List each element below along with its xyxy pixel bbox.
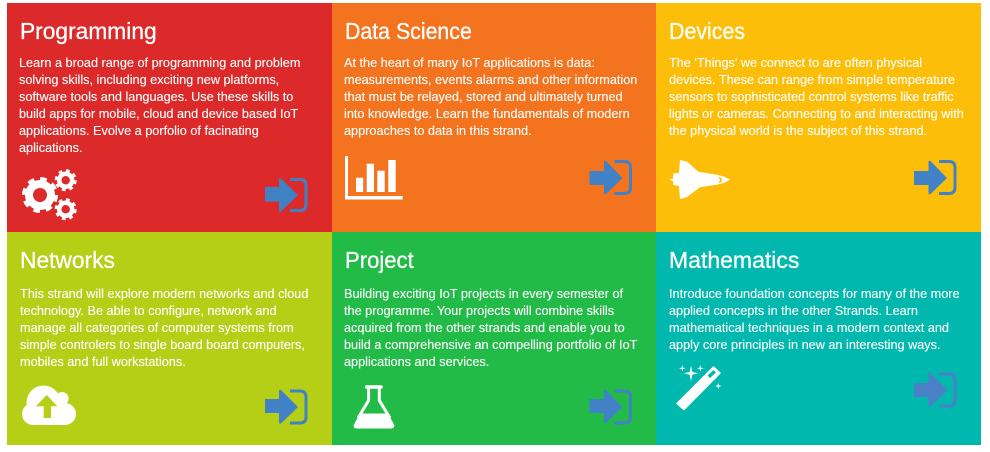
text: data science: At the heart of many IoT applications is data: bbox=[344, 56, 595, 70]
text: devices: devices. These can range from simple temperature bbox=[669, 73, 955, 87]
arrow: programming bbox=[265, 178, 306, 212]
text: programming: software tools and languages. Use these skills to bbox=[19, 90, 293, 104]
text: devices bbox=[669, 56, 964, 138]
text: networks: This strand will explore modern networks and cloud bbox=[20, 287, 308, 301]
text: project bbox=[344, 287, 638, 369]
panel: networks bbox=[7, 232, 332, 445]
arrow: networks bbox=[265, 390, 306, 424]
icon: magic wand bbox=[677, 365, 722, 410]
heading: devices: Devices bbox=[669, 18, 745, 44]
heading: project: Project bbox=[345, 247, 414, 273]
text: programming: applications. Evolve a porfolio of facinating bbox=[19, 124, 259, 138]
text: data science: into knowledge. Learn the fundamentals of modern bbox=[344, 107, 630, 121]
text: programming: aplications. bbox=[19, 141, 82, 155]
text: project: build a comprehensive an compelling portfolio of IoT bbox=[344, 338, 637, 352]
text: data science: measurements, events alarms and other information bbox=[344, 73, 637, 87]
text: mathematics bbox=[669, 287, 960, 352]
icon: space shuttle bbox=[669, 160, 730, 199]
text: networks: technology. Be able to configure, network and bbox=[20, 304, 276, 318]
text: devices: The 'Things' we connect to are often physical bbox=[669, 56, 922, 70]
heading: networks: Networks bbox=[20, 247, 115, 273]
heading: data science: Data Science bbox=[345, 18, 472, 44]
text: data science: approaches to data in this strand. bbox=[344, 124, 532, 138]
text: mathematics: mathematical techniques in a modern context and bbox=[669, 321, 949, 335]
text: programming: solving skills, including exciting new platforms, bbox=[19, 73, 279, 87]
icon: flask bbox=[354, 385, 394, 428]
icon: bar chart bbox=[345, 156, 403, 200]
arrow: data science bbox=[590, 161, 630, 194]
text: devices: the physical world is the subject of this strand. bbox=[669, 124, 927, 138]
text: project: Building exciting IoT projects in every semester of bbox=[344, 287, 623, 301]
text: networks: manage all categories of computer systems from bbox=[20, 321, 294, 335]
text: project: applications and services. bbox=[344, 355, 489, 369]
text: mathematics: Introduce foundation concepts for many of the more bbox=[669, 287, 960, 301]
panel: devices bbox=[656, 3, 981, 232]
panel: mathematics bbox=[656, 232, 981, 445]
text: devices: lights or cameras. Connecting to and interacting with bbox=[669, 107, 964, 121]
icon: gears bbox=[24, 171, 75, 219]
text: mathematics: applied concepts in the other Strands. Learn bbox=[669, 304, 918, 318]
heading: programming: Programming bbox=[20, 18, 157, 44]
panel: data science bbox=[332, 3, 656, 232]
text: mathematics: apply core principles in new an interesting ways. bbox=[669, 338, 941, 352]
icon: cloud upload bbox=[22, 386, 76, 425]
text: programming: build apps for mobile, cloud and device based IoT bbox=[19, 107, 298, 121]
panel: programming bbox=[7, 3, 332, 232]
text: networks: simple controlers to single board board computers, bbox=[20, 338, 305, 352]
arrow: devices bbox=[914, 161, 955, 194]
text: programming bbox=[19, 56, 300, 155]
arrow: mathematics bbox=[914, 372, 955, 407]
text: networks bbox=[20, 287, 308, 369]
text: project: acquired from the other strands and enable you to bbox=[344, 321, 625, 335]
heading: mathematics: Mathematics bbox=[669, 247, 799, 273]
text: project: the programme. Your projects will combine skills bbox=[344, 304, 614, 318]
text: data science bbox=[344, 56, 637, 138]
text: devices: sensors to sophisticated control systems like traffic bbox=[669, 90, 954, 104]
text: data science: that must be relayed, stored and ultimately turned bbox=[344, 90, 623, 104]
arrow: project bbox=[590, 390, 630, 423]
text: networks: mobiles and full workstations. bbox=[20, 355, 186, 369]
panel: project bbox=[332, 232, 656, 445]
text: programming: Learn a broad range of programming and problem bbox=[19, 56, 300, 70]
